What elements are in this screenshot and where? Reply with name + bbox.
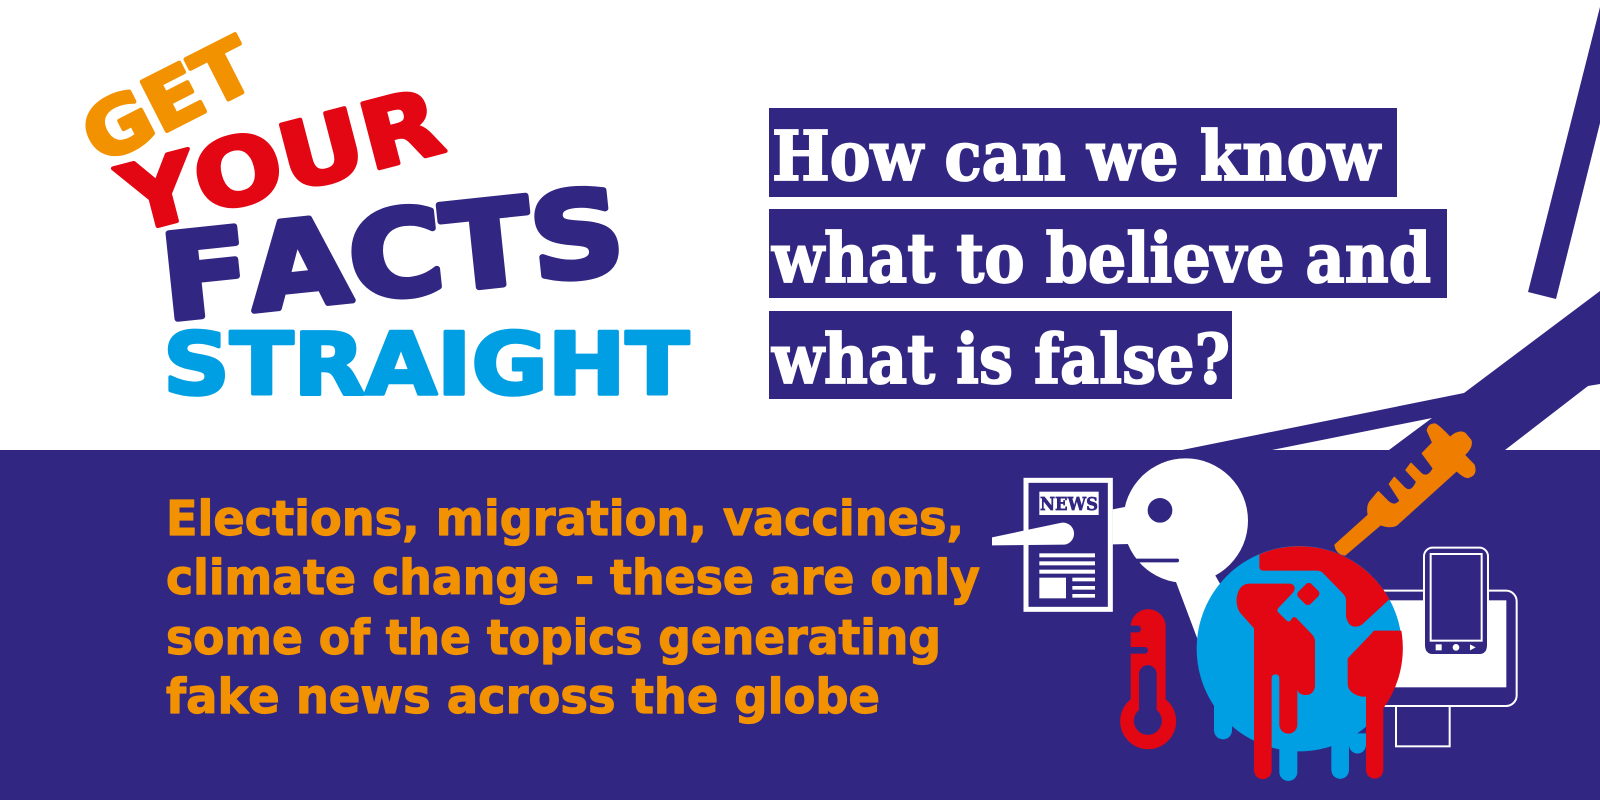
laptop-like outline shapes top right: [1182, 7, 1600, 450]
red continents: [1237, 546, 1403, 779]
title word: YOUR: YOUR: [108, 68, 453, 255]
title word: FACTS: FACTS: [155, 162, 630, 348]
headline question: [769, 108, 1447, 400]
icon: computer monitor: [1367, 591, 1517, 746]
body text: [166, 491, 980, 725]
illustration group: [992, 424, 1517, 781]
icon: smartphone: [1424, 548, 1488, 654]
headline line 3: what is false?: [771, 320, 1230, 400]
body text: some of the topics generating: [166, 610, 941, 666]
body text: fake news across the globe: [166, 669, 880, 725]
body text: climate change - these are only: [166, 550, 980, 606]
headline line 1: How can we know: [772, 117, 1381, 197]
lower purple band: [0, 450, 1600, 800]
icon: long-nosed liar figure: [992, 458, 1248, 639]
icon: melting globe: [1197, 546, 1403, 781]
title word: GET: GET: [68, 20, 269, 181]
icon: thermometer: [1120, 609, 1176, 749]
title: Get Your Facts Straight: [68, 20, 689, 415]
title word: STRAIGHT: STRAIGHT: [163, 315, 689, 415]
globe disc: [1197, 546, 1402, 751]
icon: syringe: [1335, 424, 1475, 555]
body text: Elections, migration, vaccines,: [166, 491, 964, 547]
icon: newspaper: [1026, 480, 1110, 609]
icon: newspaper: NEWS: [1040, 494, 1098, 515]
headline line 2: what to believe and: [771, 219, 1431, 299]
blue drips: [1214, 693, 1366, 781]
